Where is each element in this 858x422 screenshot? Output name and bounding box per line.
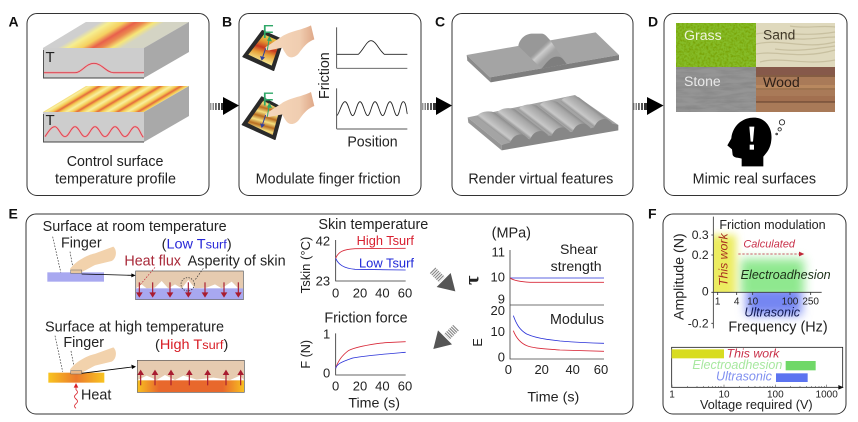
chart: shear strength and modulus: 0 [505, 362, 512, 377]
high temperature schematic: (High Tsurf) [155, 336, 228, 352]
texture: wood: Wood [763, 75, 800, 91]
chart: shear strength and modulus: Modulus [550, 312, 604, 328]
panel B: modulate finger friction [222, 14, 421, 196]
high temperature schematic: Heat [81, 387, 111, 403]
tablet with periodic stripes [242, 97, 283, 139]
force arrows 2: F [262, 88, 274, 109]
room temperature schematic: (Low Tsurf) [162, 235, 232, 251]
icon: head with exclamation [727, 118, 771, 166]
chart: shear strength and modulus: E [471, 338, 485, 347]
chart: amplitude vs frequency: Calculated [743, 239, 796, 251]
caption C: Render virtual features [468, 171, 613, 187]
chart: voltage required: 1000 [816, 390, 838, 401]
chart: voltage required: Voltage required (V) [700, 398, 813, 412]
caption D: Mimic real surfaces [693, 171, 816, 187]
chart: shear strength and modulus: 20 [491, 303, 505, 318]
chart: friction force: Friction force [324, 310, 408, 326]
arrow: modulus to friction [433, 328, 456, 349]
arrow A to B [210, 97, 239, 115]
chart: amplitude vs frequency: 1 [715, 296, 721, 307]
chart: shear strength and modulus: 20 [534, 362, 549, 377]
chart: voltage required: This work [727, 346, 780, 360]
chart: amplitude vs frequency: Friction modulation [719, 218, 826, 232]
force arrows 1 [260, 21, 274, 61]
chart: skin temperature [299, 217, 428, 301]
single ridge surface [467, 32, 619, 82]
chart: skin temperature: 23 [316, 274, 330, 289]
arrow B to C [422, 97, 452, 115]
chart: amplitude vs frequency: 4 [734, 296, 740, 307]
label B: B [222, 14, 232, 30]
chart: amplitude vs frequency: Ultrasonic [744, 306, 801, 320]
room temperature schematic: Asperity of skin [188, 254, 286, 270]
label A: A [8, 14, 19, 30]
chart: skin temperature: 20 [353, 286, 367, 301]
chart: amplitude vs frequency: Amplitude (N) [671, 233, 687, 320]
label C: C [435, 14, 445, 30]
chart: skin temperature: High Tsurf [357, 234, 415, 248]
chart: shear strength and modulus: Shear [560, 242, 598, 258]
room temperature schematic: Heat flux [124, 254, 182, 270]
chart: shear strength and modulus: Time (s) [527, 389, 579, 405]
force arrows 2 [260, 88, 274, 128]
chart: shear strength and modulus: (MPa) [492, 226, 531, 242]
high temperature schematic: Finger [63, 335, 104, 351]
chart: friction force [299, 310, 412, 411]
chart: friction force: Time (s) [348, 395, 400, 411]
finger 1 [265, 25, 314, 57]
arrow: temperature to shear strength [433, 270, 455, 291]
chart: amplitude vs frequency: 100 [782, 296, 799, 307]
chart: friction force: 0 [332, 379, 339, 394]
label E: E [8, 206, 18, 222]
chart: skin temperature: Low Tsurf [359, 256, 415, 270]
chart: amplitude vs frequency: Frequency (Hz) [728, 320, 828, 336]
caption B: Modulate finger friction [256, 171, 401, 187]
caption A: temperature profile [55, 171, 176, 187]
chart: friction force: 40 [375, 379, 390, 394]
label F: F [648, 206, 657, 222]
chart: voltage required: 10 [718, 390, 730, 401]
chart: shear strength and modulus: 9 [498, 291, 505, 306]
block with periodic hot stripes [43, 86, 189, 142]
chart: shear strength and modulus: 10 [491, 270, 505, 285]
panel D: mimic real surfaces [648, 14, 847, 196]
chart: amplitude vs frequency: -0.2 [688, 316, 709, 330]
periodic ridge surface [468, 95, 618, 150]
chart: friction force: 20 [353, 379, 367, 394]
block with single hot stripe [43, 22, 189, 78]
chart: skin temperature: 60 [398, 286, 412, 301]
arrow C to D [633, 97, 664, 115]
texture: sand [756, 23, 835, 67]
icon: thought bubbles [776, 120, 785, 135]
block with single hot stripe: T [46, 49, 55, 66]
friction chart top [337, 27, 407, 68]
block with periodic hot stripes: T [46, 112, 55, 129]
texture: stone: Stone [684, 74, 721, 90]
chart: shear strength and modulus: strength [551, 259, 602, 275]
room temperature schematic: Finger [61, 235, 102, 251]
friction chart bottom [337, 88, 407, 129]
axis label friction: Friction [317, 52, 333, 99]
axis label position: Position [347, 135, 398, 151]
chart: voltage required: 1 [669, 390, 675, 401]
chart: amplitude vs frequency: 10 [747, 296, 759, 307]
chart: skin temperature: 42 [316, 234, 330, 249]
texture: wood [756, 67, 835, 112]
force arrows 1: F [262, 21, 274, 42]
chart: friction force: 0 [323, 366, 330, 381]
texture: stone [676, 67, 756, 112]
chart: amplitude vs frequency: 0 [702, 285, 709, 299]
chart: voltage required: Electroadhesion [692, 358, 782, 372]
chart: shear strength and modulus: 0 [498, 350, 505, 365]
chart: amplitude vs frequency: 250 [802, 296, 819, 307]
caption A: Control surface [67, 154, 163, 170]
texture: grass: Grass [684, 28, 722, 44]
chart: voltage required: Ultrasonic [716, 370, 773, 384]
chart: shear strength and modulus: 60 [594, 362, 608, 377]
texture: sand: Sand [763, 28, 795, 44]
chart: shear strength and modulus: 10 [491, 324, 505, 339]
chart: amplitude vs frequency: 0.3 [692, 228, 709, 242]
chart: amplitude vs frequency: This work [716, 233, 730, 286]
panel F: comparison of modulation technologies [648, 206, 846, 414]
chart: friction force: F (N) [299, 340, 313, 369]
chart: shear strength and modulus [462, 226, 608, 405]
high temperature schematic [45, 319, 244, 408]
chart: voltage required: 100 [767, 390, 784, 401]
chart: shear strength and modulus: 40 [565, 362, 580, 377]
tablet with single stripe [243, 31, 283, 70]
room temperature schematic [43, 219, 286, 300]
chart: friction force: 1 [323, 326, 330, 341]
chart: amplitude vs frequency [671, 217, 831, 336]
texture: grass [676, 23, 756, 67]
chart: amplitude vs frequency: 0.2 [692, 248, 709, 262]
chart: skin temperature: 0 [332, 286, 339, 301]
high temperature schematic: Surface at high temperature [45, 319, 224, 335]
finger 2 [265, 92, 314, 124]
label D: D [648, 14, 658, 30]
panel E: thermal mechanism and measurements [8, 206, 633, 414]
chart: voltage required [669, 346, 844, 412]
chart: shear strength and modulus: 11 [492, 245, 505, 260]
chart: skin temperature: 40 [375, 286, 390, 301]
chart: friction force: 60 [398, 379, 412, 394]
caption A [55, 154, 176, 187]
chart: amplitude vs frequency: Electroadhesion [741, 268, 831, 282]
panel A: control surface temperature profile [8, 14, 209, 196]
chart: skin temperature: Tskin (°C) [299, 237, 313, 293]
panel C: render virtual features [435, 14, 633, 196]
chart: shear strength and modulus: τ [462, 275, 484, 285]
chart: skin temperature: Skin temperature [318, 217, 428, 233]
room temperature schematic: Surface at room temperature [43, 219, 227, 235]
